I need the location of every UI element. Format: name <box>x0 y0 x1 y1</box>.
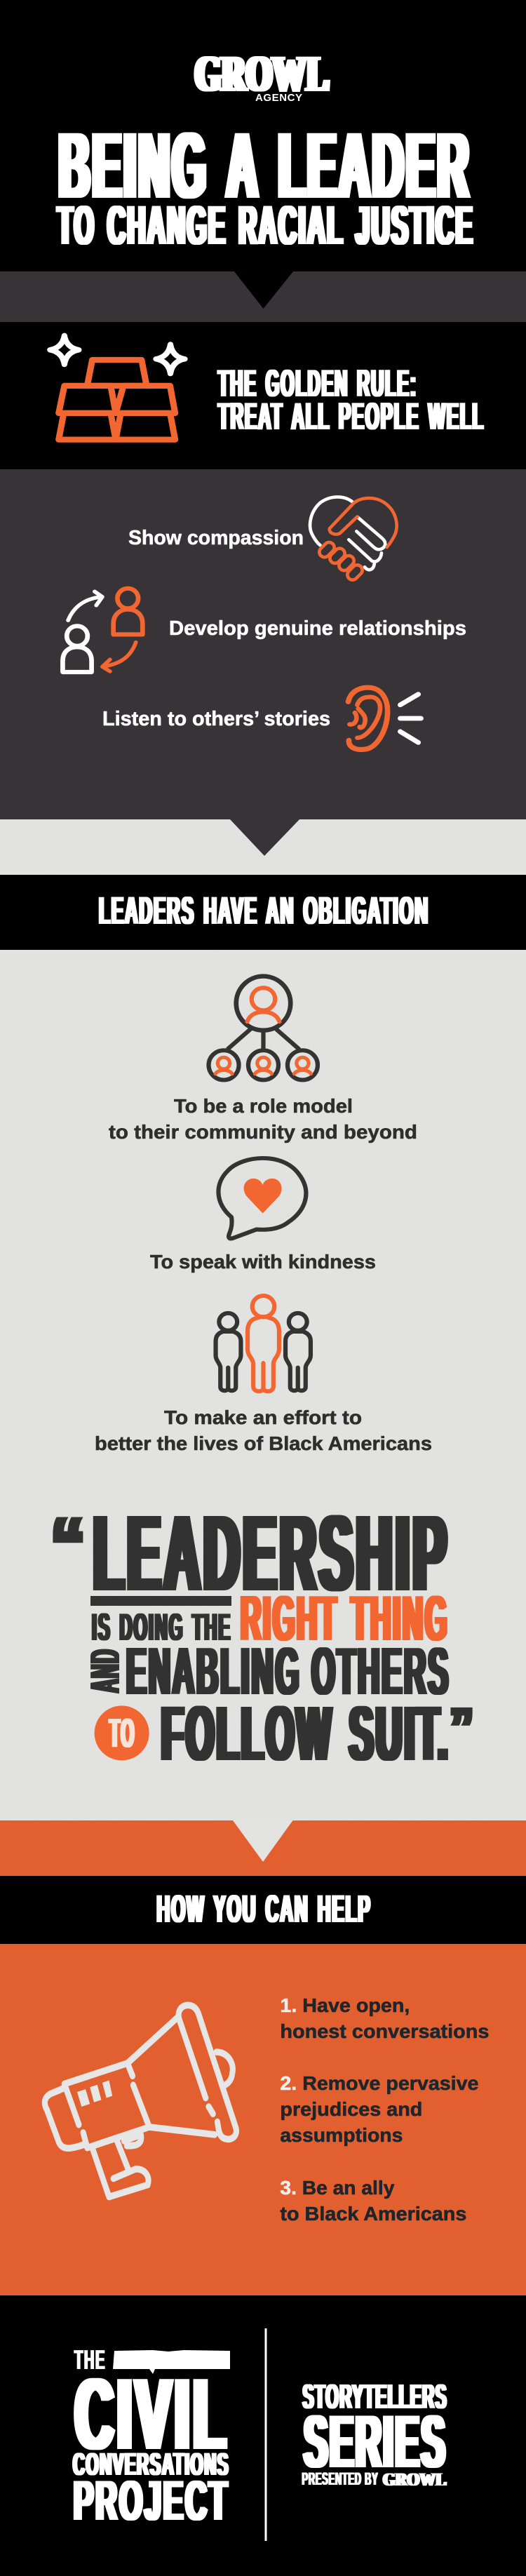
icon: ear with sound lines <box>348 687 421 749</box>
item 1: 1. Have open, <box>280 1994 410 2016</box>
logo: the civil conversations project: PROJECT <box>74 2469 229 2533</box>
list: how you can help <box>280 1994 489 2225</box>
text: role model <box>109 1095 417 1143</box>
icon: two people exchanging <box>62 589 142 672</box>
closing quotation mark: ” <box>449 1694 474 1766</box>
logo: Growl Agency <box>195 46 329 104</box>
icon: role model network <box>209 977 318 1080</box>
logo: the civil conversations project: THE <box>74 2345 106 2375</box>
arrow: panel pointer <box>230 819 299 856</box>
quote <box>50 1493 474 1777</box>
item 2 <box>280 2072 478 2146</box>
logo: storytellers series: PRESENTED BY <box>302 2469 379 2489</box>
logo: the civil conversations project <box>73 2345 230 2533</box>
title <box>58 114 474 256</box>
arrow: paper pointer <box>233 1820 293 1862</box>
quote: IS DOING THE <box>92 1605 231 1649</box>
item 3 <box>280 2177 466 2225</box>
logo: the civil conversations project: CONVERSATIONS <box>73 2446 229 2482</box>
icon: heart handshake <box>310 497 397 582</box>
item 2: 2. Remove pervasive <box>280 2072 478 2094</box>
text: role model: To be a role model <box>174 1095 353 1117</box>
item 1 <box>280 1994 489 2042</box>
text: role model: to their community and beyond <box>109 1121 417 1143</box>
rule above is doing the <box>90 1596 231 1606</box>
icon: three people <box>216 1296 311 1391</box>
item 1: honest conversations <box>280 2020 489 2042</box>
text: make an effort: To make an effort to <box>164 1407 362 1428</box>
icon: megaphone <box>45 2005 236 2197</box>
heading: the golden rule <box>218 361 485 438</box>
logo: Growl Agency: AGENCY <box>255 92 302 104</box>
arrow: title pointer <box>234 271 293 309</box>
badge: to: TO <box>109 1710 135 1756</box>
logo: storytellers series: GROWL <box>383 2469 446 2490</box>
logo: storytellers series <box>302 2377 447 2490</box>
badge: to <box>95 1705 149 1760</box>
text: make an effort <box>95 1407 432 1454</box>
text: listen to others' stories: Listen to others’ stories <box>102 708 330 730</box>
text: develop genuine relationships: Develop genuine relationships <box>169 617 466 640</box>
item 3: 3. Be an ally <box>280 2177 395 2199</box>
logo: Growl Agency: GROWL <box>195 46 329 102</box>
text: show compassion: Show compassion <box>128 527 304 549</box>
text: speak with kindness: To speak with kindness <box>150 1251 376 1273</box>
redaction bar <box>113 2350 230 2374</box>
item 2: prejudices and <box>280 2098 422 2120</box>
text: make an effort: better the lives of Black Americans <box>95 1433 432 1454</box>
opening quotation mark: “ <box>50 1497 86 1599</box>
icon: gold bars with sparkles <box>50 335 185 440</box>
icon: speech bubble with heart <box>218 1158 306 1238</box>
logo: the civil conversations project: CIVIL <box>75 2357 229 2471</box>
divider <box>265 2328 267 2541</box>
item 2: assumptions <box>280 2124 403 2146</box>
quote: AND <box>82 1649 128 1693</box>
item 3: to Black Americans <box>280 2203 466 2225</box>
